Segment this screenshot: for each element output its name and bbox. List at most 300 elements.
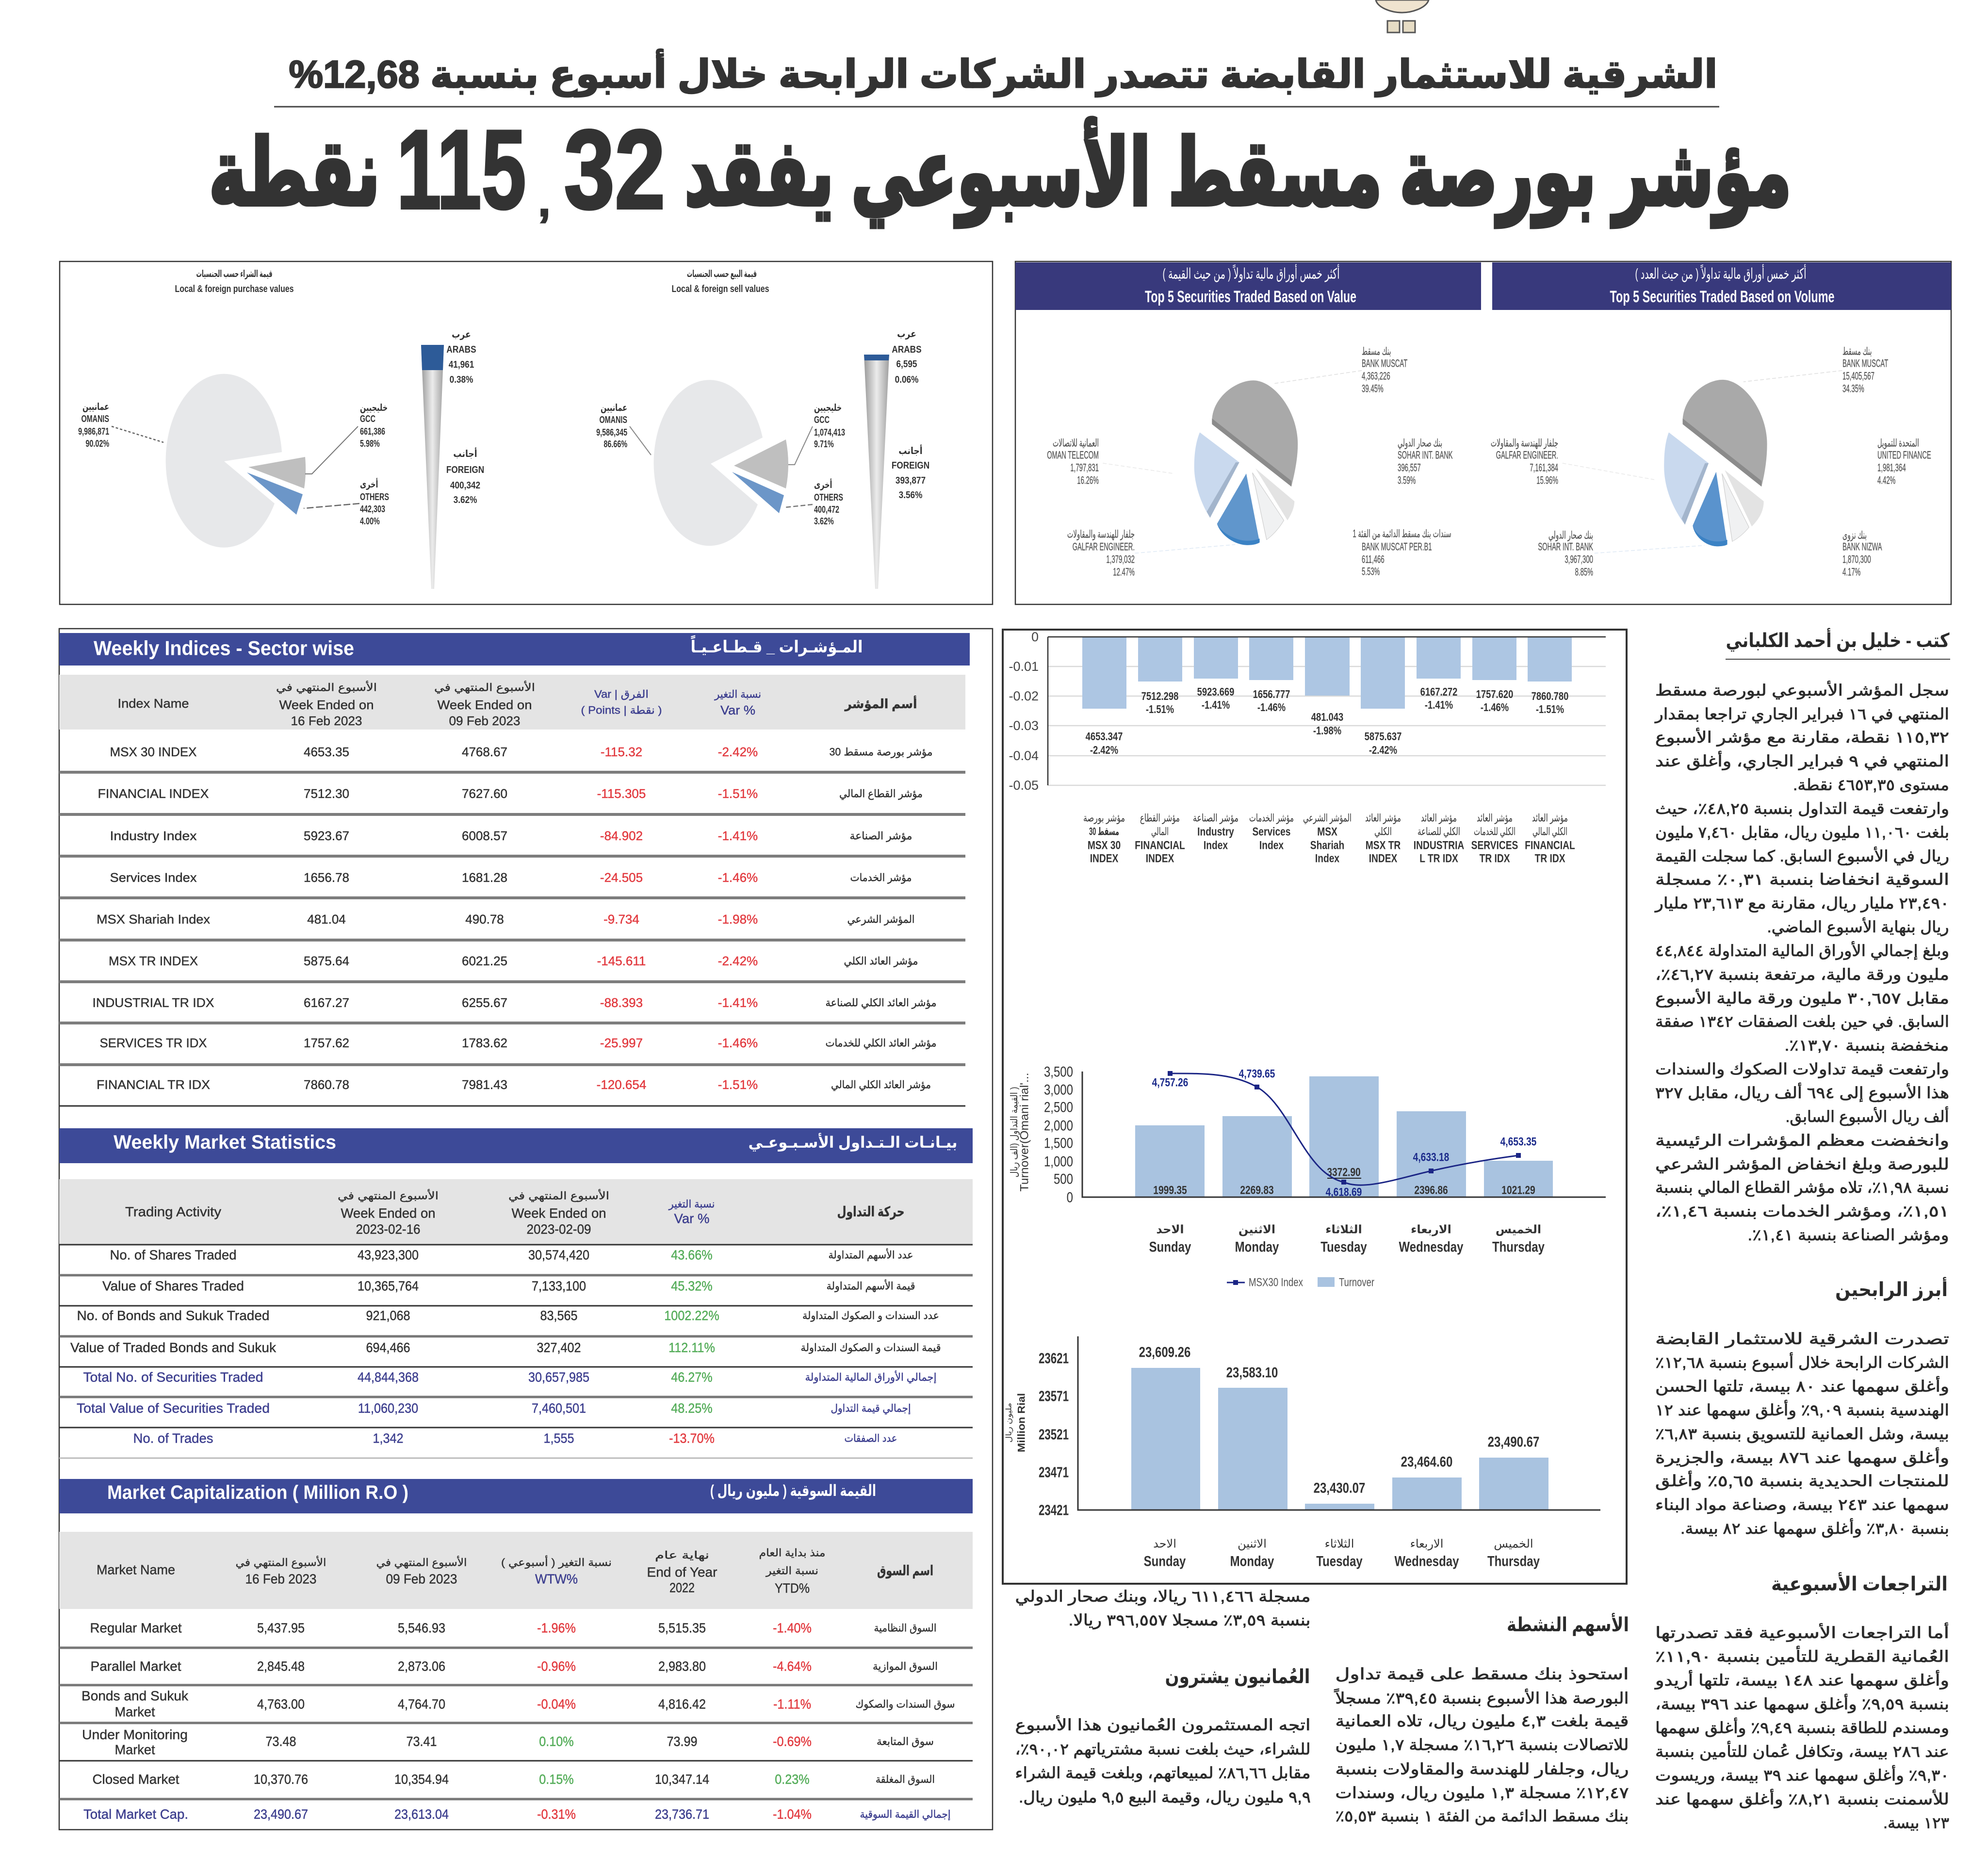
table header row: نسبة التغير bbox=[714, 688, 761, 700]
paragraph: weekly index summary: للبورصة وبلغ انخفاض المؤشر الشرعي bbox=[1655, 1155, 1949, 1173]
labels: volume pie: 15,405,567 bbox=[1842, 370, 1874, 382]
day labels: Sunday bbox=[1149, 1238, 1191, 1255]
y axis ticks bbox=[1039, 1350, 1069, 1518]
labels: volume pie: 34.35% bbox=[1842, 383, 1864, 394]
main headline: 115 bbox=[397, 107, 526, 233]
table header row: 2023-02-16 bbox=[356, 1221, 420, 1237]
paragraph: active stocks: بنك مسقط الدائمة من الفئة ١ بنسبة ٥,٥٣٪ bbox=[1335, 1807, 1629, 1825]
row: Shariah: MSX Shariah Index bbox=[97, 912, 210, 926]
bar value labels: 5875.637 bbox=[1365, 731, 1401, 743]
bar value labels: 7512.298 bbox=[1141, 690, 1178, 703]
heading: weekly decliners: التراجعات الأسبوعية bbox=[1771, 1572, 1948, 1595]
table header row: Trading Activity bbox=[125, 1204, 221, 1219]
row: bonds traded: 1002.22% bbox=[664, 1308, 719, 1323]
chart: purchase pie bbox=[112, 374, 359, 548]
chart: daily turnover and MSX30 index bbox=[1009, 1063, 1606, 1289]
bar value labels bbox=[1139, 1344, 1539, 1496]
category labels: مؤشر الصناعة bbox=[1193, 812, 1238, 824]
table header row bbox=[59, 1179, 973, 1245]
paragraph: weekly index summary: وبلغ إجمالي الأوراق المالية المتداولة ٤٤,٨٤٤ bbox=[1655, 941, 1949, 960]
day labels: الخميس bbox=[1494, 1538, 1533, 1550]
paragraph: weekly decliners: وأغلق سهمها عند ١٤٨ بيسة، تلتها أريدو bbox=[1654, 1670, 1949, 1689]
paragraph: weekly index summary: مقابل ٣٠,٦٥٧ مليون ورقة مالية الأسبوع bbox=[1655, 989, 1949, 1007]
pie labels: sell: خليجيين bbox=[814, 402, 842, 414]
row: trades: 1,555 bbox=[543, 1430, 574, 1446]
line series: MSX30 index: 4,739.65 bbox=[1239, 1067, 1275, 1080]
bar value labels bbox=[1153, 1165, 1535, 1197]
row: total value: 11,060,230 bbox=[358, 1400, 418, 1416]
row: trades: عدد الصفقات bbox=[844, 1432, 897, 1445]
pie labels: purchase: عمانيين bbox=[82, 401, 109, 413]
article: main column text bbox=[1654, 628, 1950, 1832]
pie labels: sell: أجانب bbox=[898, 444, 923, 456]
y axis ticks: -0.05 bbox=[1009, 778, 1039, 793]
row: shares traded: عدد الأسهم المتداولة bbox=[829, 1249, 913, 1261]
row: Financial: -115.305 bbox=[597, 786, 646, 801]
paragraph: weekly index summary: نسبة ١,٩٨٪، تلاه مؤشر القطاع المالي بنسبة bbox=[1655, 1179, 1949, 1197]
row: total market cap: 23,490.67 bbox=[254, 1806, 308, 1822]
row: Industry bbox=[110, 828, 912, 843]
row: Financial TR: -1.51% bbox=[718, 1077, 758, 1092]
labels: value pie: بنك صحار الدولي bbox=[1398, 437, 1442, 449]
row: closed market: 10,354.94 bbox=[394, 1771, 449, 1787]
labels: value pie bbox=[1047, 345, 1453, 578]
labels: volume pie: 8.85% bbox=[1575, 566, 1593, 578]
paragraph: top gainers: للمنتجات الحديدية بنسبة ٥,٦٥٪ وأغلق bbox=[1655, 1471, 1949, 1490]
table header row: الفرق | Var bbox=[594, 688, 649, 700]
labels: value pie: SOHAR INT. BANK bbox=[1398, 449, 1453, 461]
row: MSX TR: 6021.25 bbox=[462, 954, 507, 968]
day labels: الاربعاء bbox=[1411, 1223, 1451, 1236]
labels: value pie: 396,557 bbox=[1398, 462, 1421, 473]
pie labels: purchase: 442,303 bbox=[360, 503, 385, 514]
row: Financial TR: مؤشر العائد الكلي المالي bbox=[831, 1079, 931, 1091]
row: Services TR: -25.997 bbox=[600, 1036, 643, 1050]
pie labels: sell: 400,472 bbox=[814, 504, 839, 515]
paragraph: weekly index summary: ومؤشر الصناعة بنسبة ١,٤١٪. bbox=[1747, 1226, 1949, 1244]
category labels: الكلي bbox=[1374, 826, 1392, 838]
day labels: الاحد bbox=[1153, 1538, 1176, 1550]
table title band: بيـانـات الـتـداول الأسـبـوعـي bbox=[748, 1133, 958, 1152]
paragraph: active stocks: ١٢,٤٧٪ مسجلة ١,٣ مليون ريال، وسندات bbox=[1335, 1784, 1629, 1802]
row: Services: -24.505 bbox=[600, 870, 643, 885]
bar value labels: 23,490.67 bbox=[1488, 1433, 1539, 1450]
bar value labels: 2396.86 bbox=[1414, 1183, 1448, 1197]
y axis title: Million Rial bbox=[1016, 1393, 1027, 1452]
paragraph: weekly index summary: ألف ريال الأسبوع السابق. bbox=[1785, 1106, 1949, 1126]
row: under monitoring: 0.10% bbox=[539, 1734, 574, 1749]
line series: MSX30 index: 4,757.26 bbox=[1152, 1075, 1188, 1089]
table header row: 09 Feb 2023 bbox=[449, 714, 520, 728]
header band: by value: Top 5 Securities Traded Based on Value bbox=[1145, 288, 1356, 306]
row: closed market: 0.23% bbox=[775, 1771, 810, 1787]
row: parallel market: السوق الموازية bbox=[873, 1660, 938, 1672]
row: under monitoring bbox=[82, 1727, 934, 1757]
table title band: Weekly Indices - Sector wise bbox=[94, 636, 354, 660]
paragraph: top gainers: وأغلق سهمها عند ٨٠ بيسة، تلتها الحسن bbox=[1655, 1376, 1949, 1396]
row: value of bonds: 327,402 bbox=[537, 1340, 581, 1355]
table header row: Week Ended on bbox=[341, 1206, 436, 1220]
day labels bbox=[1144, 1538, 1540, 1569]
paragraph: weekly index summary: وارتفعت قيمة التداول بنسبة ٤٨,٢٥٪، حيث bbox=[1655, 800, 1949, 818]
pie labels: purchase bbox=[78, 329, 484, 526]
y axis ticks: 23471 bbox=[1039, 1464, 1069, 1480]
legend: MSX30 Index bbox=[1249, 1276, 1303, 1289]
labels: volume pie: بنك صحار الدولي bbox=[1548, 529, 1593, 541]
pie labels: purchase: 4.00% bbox=[360, 516, 380, 526]
row: parallel market: Parallel Market bbox=[90, 1659, 181, 1673]
row: bonds traded: No. of Bonds and Sukuk Traded bbox=[77, 1308, 270, 1323]
chart: daily market capitalisation bbox=[1005, 1336, 1600, 1569]
labels: volume pie bbox=[1491, 345, 1931, 578]
category labels: مؤشر بورصة bbox=[1083, 812, 1125, 824]
row: Shariah: المؤشر الشرعي bbox=[847, 913, 915, 925]
labels: volume pie: بنك مسقط bbox=[1842, 345, 1872, 357]
pie labels: sell: أخرى bbox=[814, 478, 832, 491]
legend: Turnover bbox=[1339, 1276, 1374, 1289]
chart: value pie bbox=[1103, 371, 1362, 553]
labels: volume pie: 7,161,384 bbox=[1530, 462, 1558, 473]
labels: value pie: العمانية للاتصالات bbox=[1053, 437, 1099, 449]
header band: by volume: أكثر خمس أوراق مالية تداولاً ( من حيث العدد ) bbox=[1635, 264, 1807, 282]
row: bonds market: 4,816.42 bbox=[658, 1696, 706, 1712]
day labels: Thursday bbox=[1487, 1553, 1540, 1569]
category labels: مؤشر الخدمات bbox=[1249, 812, 1294, 824]
row: Financial TR: FINANCIAL TR IDX bbox=[97, 1077, 210, 1092]
labels: value pie: GALFAR ENGINEER. bbox=[1073, 541, 1135, 552]
panel: top 5 securities bbox=[1015, 261, 1951, 604]
category labels: INDEX bbox=[1146, 851, 1174, 865]
row: Financial TR bbox=[97, 1077, 931, 1092]
table header row: YTD% bbox=[775, 1580, 810, 1596]
pie labels: sell: عمانيين bbox=[601, 402, 627, 414]
row: total value: 7,460,501 bbox=[532, 1400, 586, 1416]
table header row: الأسبوع المنتهي في bbox=[338, 1189, 439, 1202]
heading: purchase values: قيمة الشراء حسب الجنسيات bbox=[196, 269, 273, 279]
y axis title: Turnover(Omani rial'... bbox=[1018, 1073, 1031, 1191]
table: weekly indices sector wise bbox=[59, 633, 970, 1106]
paragraph: weekly decliners: للأسمنت بنسبة ٨,٢١٪ وأغلق سهمها عند bbox=[1655, 1789, 1949, 1808]
row: regular market: 5,546.93 bbox=[398, 1620, 445, 1636]
bar value labels: 1656.777 bbox=[1253, 688, 1290, 701]
subtitle headline: الشرقية للاستثمار القابضة تتصدر الشركات الرابحة خلال أسبوع بنسبة 12,68% bbox=[289, 49, 1717, 97]
row: Industry: 5923.67 bbox=[304, 828, 349, 843]
y axis ticks: 0 bbox=[1031, 630, 1039, 644]
row: total market cap: 23,613.04 bbox=[394, 1806, 449, 1822]
labels: volume pie: BANK MUSCAT bbox=[1842, 357, 1888, 369]
category labels: الكلي للصناعة bbox=[1418, 826, 1460, 838]
labels: volume pie: 1,981,364 bbox=[1877, 462, 1906, 473]
pie labels: sell: 9,586,345 bbox=[596, 427, 627, 438]
row: value of shares: 45.32% bbox=[671, 1278, 713, 1294]
row: value of shares: قيمة الأسهم المتداولة bbox=[827, 1280, 915, 1292]
table header row: Var % bbox=[674, 1211, 709, 1226]
row: MSX 30: 4653.35 bbox=[304, 745, 349, 759]
day labels: Wednesday bbox=[1399, 1238, 1463, 1255]
row: total securities: إجمالي الأوراق المالية المتداولة bbox=[805, 1371, 936, 1383]
row: Industrial TR: INDUSTRIAL TR IDX bbox=[92, 995, 214, 1010]
paragraph: weekly decliners: ومسندم للطاقة بنسبة ٩,٤٩٪ وأغلق سهمها bbox=[1655, 1718, 1949, 1737]
day labels: الاربعاء bbox=[1410, 1538, 1443, 1550]
row: value of shares: 10,365,764 bbox=[358, 1278, 419, 1294]
bar value labels: 5923.669 bbox=[1197, 686, 1234, 698]
heading: active stocks: الأسهم النشطة bbox=[1507, 1612, 1629, 1636]
main headline: 32 bbox=[564, 107, 666, 233]
table header row: اسم السوق bbox=[877, 1563, 933, 1578]
panel: charts bbox=[1003, 630, 1627, 1584]
main headline: , bbox=[538, 177, 551, 226]
row: bonds traded: عدد السندات و الصكوك المتداولة bbox=[802, 1310, 939, 1321]
row: total value: إجمالي قيمة التداول bbox=[831, 1402, 911, 1414]
table header row bbox=[59, 1532, 973, 1609]
paragraph: weekly decliners: بنسبة ٩,٥٩٪ وأغلق سهمها عند ٣٩٦ بيسة، bbox=[1655, 1694, 1949, 1713]
bar value labels: -1.51% bbox=[1146, 703, 1174, 716]
chart: volume pie bbox=[1563, 371, 1842, 553]
row: MSX TR bbox=[109, 954, 918, 968]
row: Financial: 7627.60 bbox=[462, 786, 507, 801]
paragraph: continuation from active stocks: مسجلة ٦١١,٤٦٦ ريالا، وبنك صحار الدولي bbox=[1015, 1588, 1311, 1606]
table: weekly market statistics bbox=[59, 1128, 973, 1458]
table header row bbox=[59, 675, 965, 730]
pie labels: purchase: خليجيين bbox=[360, 402, 388, 414]
y axis ticks: 23421 bbox=[1039, 1502, 1069, 1518]
paragraph: active stocks: ريال، وجلفار للهندسة والمقاولات بنسبة bbox=[1335, 1760, 1629, 1778]
day labels: Monday bbox=[1235, 1238, 1279, 1255]
row: total value: 48.25% bbox=[671, 1400, 713, 1416]
pie labels: sell: 3.56% bbox=[899, 489, 923, 500]
bar value labels: -1.98% bbox=[1313, 725, 1341, 737]
paragraph: top gainers: الشركات الرابحة خلال أسبوع بنسبة ١٢,٦٨٪ bbox=[1655, 1352, 1949, 1372]
row: shares traded: 43.66% bbox=[671, 1247, 713, 1263]
row: trades: 1,342 bbox=[373, 1430, 404, 1446]
y axis ticks: 0 bbox=[1067, 1189, 1073, 1205]
paragraph: weekly index summary: السابق. في حين بلغت الصفقات ١٣٤٢ صفقة bbox=[1655, 1013, 1949, 1031]
paragraph: omanis buying: للشراء، حيث بلغت نسبة مشترياتهم ٩٠,٠٢٪، bbox=[1015, 1740, 1311, 1758]
row: under monitoring: -0.69% bbox=[773, 1734, 812, 1749]
labels: value pie: BANK MUSCAT PER.B1 bbox=[1362, 541, 1432, 552]
line series: MSX30 index: 4,618.69 bbox=[1326, 1185, 1362, 1199]
y axis ticks: 2,500 bbox=[1044, 1099, 1073, 1115]
row: bonds traded: 83,565 bbox=[540, 1308, 578, 1323]
paragraph: weekly decliners: العُمانية القطرية للتأمين بنسبة ١١,٩٠٪ bbox=[1655, 1646, 1949, 1666]
category labels: INDUSTRIA bbox=[1414, 838, 1465, 852]
table header row: 16 Feb 2023 bbox=[245, 1572, 316, 1586]
table header row: الأسبوع المنتهي في bbox=[434, 681, 535, 694]
row: under monitoring: 73.48 bbox=[265, 1734, 296, 1749]
row: Shariah: 490.78 bbox=[465, 912, 504, 926]
table header row: الأسبوع المنتهي في bbox=[236, 1556, 326, 1569]
y axis title bbox=[1005, 1393, 1027, 1452]
bar value labels: 2269.83 bbox=[1240, 1183, 1274, 1197]
labels: value pie: 4,363,226 bbox=[1362, 370, 1390, 382]
heading: sell values: Local & foreign sell values bbox=[671, 284, 769, 294]
category labels: TR IDX bbox=[1480, 851, 1510, 865]
category labels: FINANCIAL bbox=[1135, 838, 1185, 852]
row: Services: -1.46% bbox=[718, 870, 758, 885]
paragraph: top gainers bbox=[1655, 1330, 1949, 1538]
bar value labels: 1757.620 bbox=[1476, 688, 1513, 701]
paragraph: active stocks bbox=[1334, 1665, 1629, 1825]
row: Industrial TR: 6255.67 bbox=[462, 995, 507, 1010]
labels: value pie: OMAN TELECOM bbox=[1047, 449, 1099, 461]
paragraph: weekly index summary: ريال بنهاية الأسبوع الماضي. bbox=[1767, 917, 1949, 936]
row: Services TR: مؤشر العائد الكلي للخدمات bbox=[826, 1037, 936, 1050]
row: bonds market: -1.11% bbox=[773, 1696, 811, 1712]
paragraph: weekly index summary: منخفضة بنسبة ١٣,٧٠٪. bbox=[1784, 1037, 1949, 1054]
paragraph: weekly index summary: السوقية انخفاضا بنسبة ٠,٣١٪ مسجلة bbox=[1655, 871, 1949, 889]
table header row: 09 Feb 2023 bbox=[386, 1572, 457, 1586]
table header row: WTW% bbox=[535, 1572, 578, 1586]
paragraph: omanis buying bbox=[1015, 1715, 1311, 1806]
table header row: الأسبوع المنتهي في bbox=[376, 1556, 467, 1569]
header band: by volume: Top 5 Securities Traded Based on Volume bbox=[1610, 288, 1835, 306]
day labels: Wednesday bbox=[1395, 1553, 1459, 1569]
labels: volume pie: 3,967,300 bbox=[1564, 553, 1593, 565]
row: total market cap: إجمالي القيمة السوقية bbox=[860, 1808, 951, 1821]
row separators bbox=[59, 772, 965, 1106]
pie labels: purchase: 0.38% bbox=[450, 374, 473, 385]
row: total market cap: -0.31% bbox=[537, 1806, 576, 1822]
paragraph: weekly decliners: أما التراجعات الأسبوعية فقد تصدرتها bbox=[1655, 1623, 1949, 1642]
category labels: Index bbox=[1204, 838, 1228, 852]
row: Shariah: -9.734 bbox=[603, 912, 639, 926]
row: regular market: 5,515.35 bbox=[658, 1620, 706, 1636]
paragraph: active stocks: استحوذ بنك مسقط على قيمة تداول bbox=[1335, 1665, 1629, 1683]
bar value labels: -2.42% bbox=[1369, 744, 1397, 757]
bar value labels: 1999.35 bbox=[1153, 1183, 1187, 1197]
pie labels: sell: 1,074,413 bbox=[814, 427, 845, 438]
row: parallel market: 2,983.80 bbox=[658, 1658, 706, 1674]
day labels: الخميس bbox=[1496, 1223, 1541, 1236]
paragraph: omanis buying: اتجه المستثمرون العُمانيون هذا الأسبوع bbox=[1015, 1715, 1311, 1734]
pie labels: purchase: FOREIGN bbox=[446, 464, 484, 475]
labels: value pie: بنك مسقط bbox=[1362, 345, 1391, 357]
line series: MSX30 index: 4,633.18 bbox=[1413, 1150, 1449, 1164]
labels: value pie: سندات بنك مسقط الدائمة من الفئة 1 bbox=[1352, 528, 1451, 540]
labels: value pie: 611,466 bbox=[1362, 553, 1385, 565]
table header row: 16 Feb 2023 bbox=[291, 714, 362, 728]
table header row: منذ بداية العام bbox=[759, 1546, 826, 1559]
panel: statistics tables bbox=[59, 629, 993, 1830]
row: value of bonds: 112.11% bbox=[668, 1340, 715, 1355]
row: parallel market bbox=[90, 1658, 938, 1674]
heading: omanis buying: العُمانيون يشترون bbox=[1165, 1666, 1310, 1688]
row: total securities: Total No. of Securities Traded bbox=[83, 1370, 263, 1384]
pie labels: sell: 393,877 bbox=[896, 475, 926, 486]
main headline: نقطة bbox=[209, 122, 380, 225]
y axis ticks bbox=[1009, 630, 1039, 793]
table header row: نسبة التغير ( أسبوعي ) bbox=[501, 1555, 612, 1569]
bar value labels: 3372.90 bbox=[1327, 1165, 1361, 1179]
table header row: نسبة التغير bbox=[668, 1198, 715, 1210]
row: trades: No. of Trades bbox=[133, 1431, 213, 1445]
row: MSX 30: -115.32 bbox=[601, 745, 642, 759]
table header row: Var % bbox=[720, 703, 755, 717]
table header row: الأسبوع المنتهي في bbox=[508, 1189, 609, 1202]
day labels bbox=[1149, 1223, 1545, 1255]
y axis title: مليون ريال bbox=[1005, 1403, 1014, 1443]
row: regular market bbox=[90, 1620, 936, 1636]
table header row: أسم المؤشر bbox=[844, 696, 917, 712]
row: parallel market: 2,873.06 bbox=[398, 1658, 445, 1674]
day labels: الثلاثاء bbox=[1325, 1538, 1354, 1550]
row: Industry: Industry Index bbox=[110, 828, 197, 843]
labels: value pie: 39.45% bbox=[1362, 383, 1384, 394]
pie labels: purchase: عرب bbox=[452, 329, 471, 340]
row: closed market bbox=[92, 1771, 935, 1787]
row: bonds traded: 921,068 bbox=[366, 1308, 410, 1323]
row: Industry: مؤشر الصناعة bbox=[850, 829, 912, 842]
pie labels: purchase: 661,386 bbox=[360, 426, 385, 437]
row: shares traded: 43,923,300 bbox=[358, 1247, 419, 1263]
row: closed market: 0.15% bbox=[539, 1771, 574, 1787]
category labels: الكلي للخدمات bbox=[1474, 826, 1515, 838]
heading: sell values: قيمة البيع حسب الجنسيات bbox=[687, 269, 757, 279]
row: Financial TR: 7860.78 bbox=[304, 1077, 349, 1092]
pie labels: sell: 0.06% bbox=[895, 374, 919, 385]
labels: volume pie: 15.96% bbox=[1536, 474, 1558, 486]
row: Financial: FINANCIAL INDEX bbox=[98, 786, 209, 801]
bar value labels: -2.42% bbox=[1090, 744, 1118, 757]
table title band: القيمة السوقية ( مليون ريال ) bbox=[710, 1482, 876, 1500]
row: parallel market: 2,845.48 bbox=[257, 1658, 305, 1674]
row: Services: Services Index bbox=[110, 870, 197, 885]
labels: volume pie: UNITED FINANCE bbox=[1877, 449, 1931, 461]
category labels: MSX 30 bbox=[1088, 838, 1121, 852]
pie labels: purchase: ARABS bbox=[446, 344, 476, 355]
pie labels: sell: 6,595 bbox=[896, 358, 917, 369]
table header row: End of Year bbox=[647, 1565, 717, 1579]
row: value of bonds: قيمة السندات و الصكوك المتداولة bbox=[800, 1342, 941, 1353]
row: under monitoring: Under Monitoring bbox=[82, 1727, 188, 1742]
paragraph: weekly index summary: المنتهي في ١٦ فبراير الجاري تراجعا بمقدار bbox=[1654, 705, 1949, 723]
paragraph: weekly index summary: المنتهي في ٩ فبراير الجاري، وأغلق عند bbox=[1655, 751, 1949, 770]
y axis ticks: 23621 bbox=[1039, 1350, 1069, 1366]
paragraph: continuation from active stocks: بنسبة ٣,٥٩٪ مسجلا ٣٩٦,٥٥٧ ريالا. bbox=[1068, 1611, 1311, 1629]
paragraph: weekly index summary: ١١٥,٣٢ نقطة، مقارنة مع مؤشر الأسبوع bbox=[1655, 728, 1949, 747]
table header row: 2022 bbox=[669, 1580, 695, 1595]
pie labels: sell bbox=[596, 328, 929, 526]
pie labels: sell: 86.66% bbox=[603, 438, 628, 449]
pie labels: purchase: 3.62% bbox=[454, 494, 477, 505]
row: shares traded bbox=[110, 1247, 913, 1263]
day labels: Monday bbox=[1230, 1553, 1274, 1569]
row: total securities bbox=[83, 1369, 936, 1385]
row: under monitoring: 73.99 bbox=[667, 1734, 698, 1749]
table title band: المـؤشـرات _ قـطـاعـيـاً bbox=[691, 635, 863, 657]
pie labels: purchase: 90.02% bbox=[85, 438, 110, 449]
labels: value pie: BANK MUSCAT bbox=[1362, 357, 1407, 369]
icon: columnist portrait fragment bbox=[1376, 0, 1429, 32]
paragraph: weekly index summary: مستوى ٤٦٥٣,٣٥ نقطة. bbox=[1793, 776, 1949, 794]
category labels: Industry bbox=[1197, 825, 1234, 838]
row: MSX TR: مؤشر العائد الكلي bbox=[844, 955, 918, 967]
paragraph: top gainers: بنسبة ٣,٨٠٪ وأغلق سهمها عند ٨٢ بيسة. bbox=[1680, 1518, 1949, 1538]
row: regular market: -1.40% bbox=[773, 1620, 812, 1636]
table title band: Market Capitalization ( Million R.O ) bbox=[107, 1482, 408, 1503]
table title band bbox=[59, 633, 970, 666]
row: bonds market: -0.04% bbox=[537, 1696, 576, 1712]
labels: volume pie: BANK NIZWA bbox=[1842, 541, 1882, 552]
row: value of shares: 7,133,100 bbox=[532, 1278, 586, 1294]
chart: purchase cone bbox=[421, 345, 444, 589]
row: value of bonds: Value of Traded Bonds and Sukuk bbox=[70, 1340, 277, 1355]
category labels: Shariah bbox=[1310, 838, 1344, 852]
row: under monitoring: 73.41 bbox=[406, 1734, 437, 1749]
header band: by value bbox=[1015, 262, 1481, 310]
row: total market cap bbox=[83, 1806, 951, 1822]
row: bonds traded bbox=[77, 1308, 939, 1323]
